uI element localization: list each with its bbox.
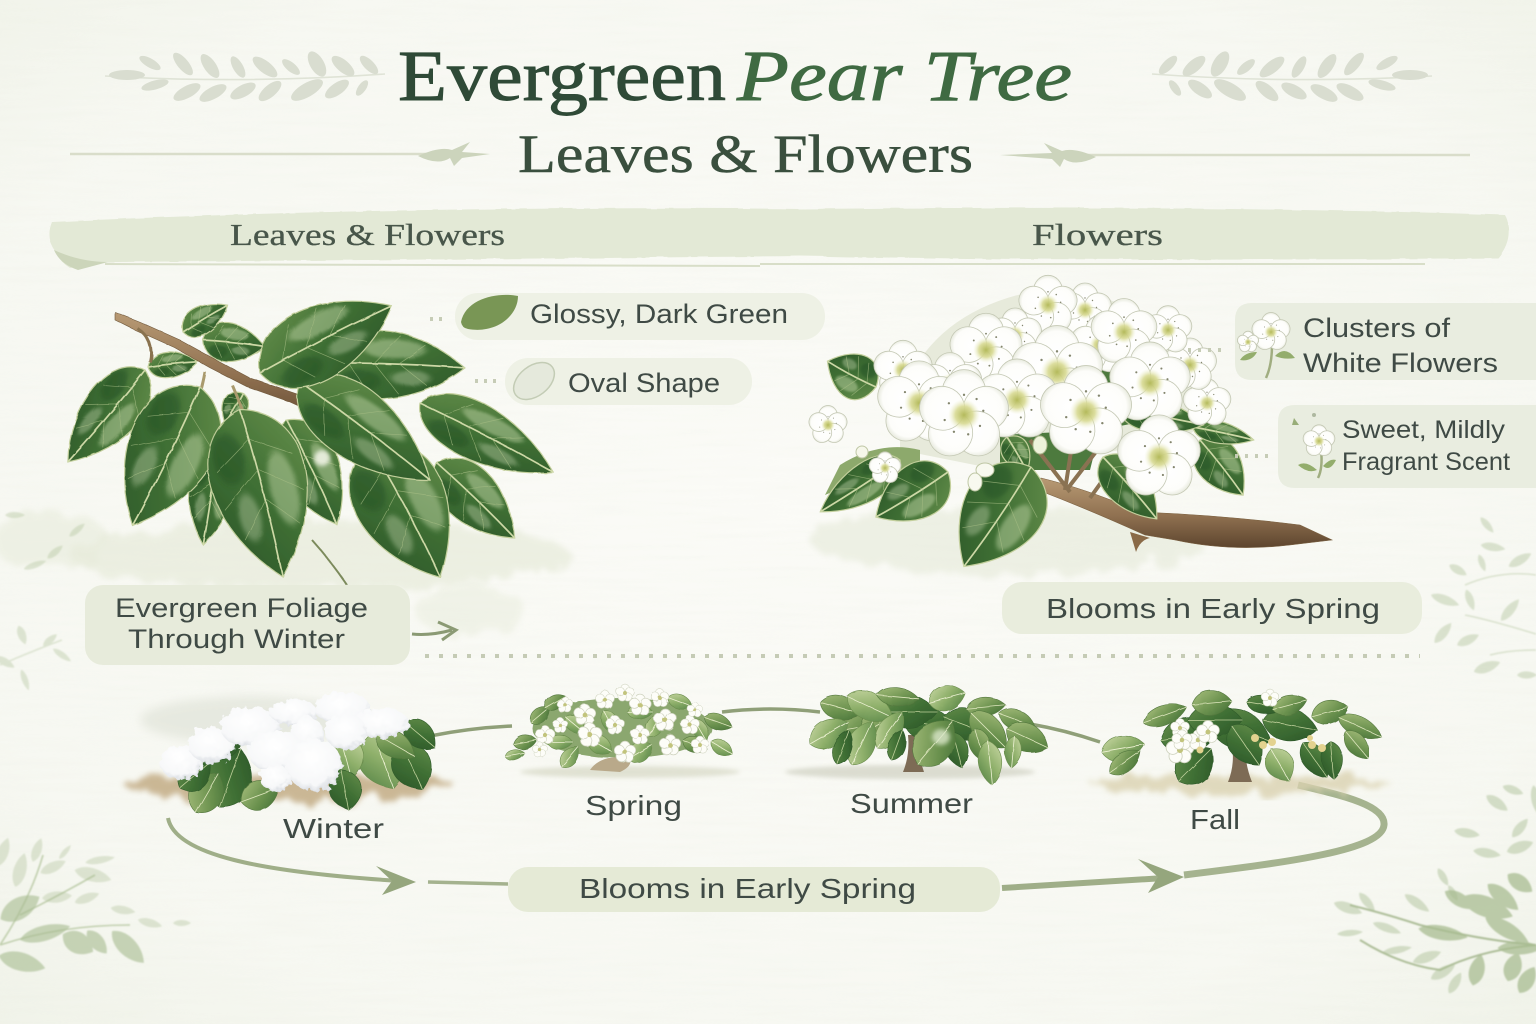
icon: scented flower [1292, 413, 1337, 478]
dotted divider [425, 654, 1420, 658]
callout: clusters of white flowers: White Flowers [1303, 348, 1498, 378]
illustration: glossy leaf branch [46, 273, 570, 599]
decorative foliage: right edge [1429, 515, 1536, 679]
season: spring [504, 684, 740, 778]
icon: dark green leaf [461, 295, 518, 330]
illustration: flower cluster [807, 275, 1332, 589]
decorative foliage: bottom left [0, 836, 191, 977]
callout: glossy dark green [430, 293, 825, 340]
season: fall [1090, 689, 1390, 794]
subtitle rule left [70, 142, 490, 166]
subtitle rule right [1000, 143, 1470, 167]
callout: bottom blooms in early spring: Blooms in Early Spring [579, 873, 916, 904]
callout: sweet mildly fragrant scent: Fragrant Scent [1342, 448, 1510, 476]
label: summer: Summer [850, 788, 973, 819]
callout: bottom blooms in early spring [508, 867, 1000, 912]
title ornament: left sprig [105, 48, 385, 105]
callout: blooms in early spring [1002, 582, 1422, 634]
callout: oval shape [475, 355, 752, 407]
label: sweet mildly fragrant scent: Sweet, Mildly [1342, 416, 1506, 444]
label: glossy dark green: Glossy, Dark Green [530, 299, 788, 329]
title ornament: right sprig [1152, 48, 1432, 105]
arrow stub into the pill [428, 882, 508, 884]
subtitle: Leaves & Flowers [518, 124, 973, 184]
arrow: pill to fall [1002, 859, 1184, 893]
callout: sweet mildly fragrant scent [1235, 405, 1536, 488]
arrow: to the right [412, 622, 456, 640]
season cycle arrows [168, 785, 1384, 895]
decorative foliage: left edge [0, 512, 87, 691]
ribbon heading: flowers: Flowers [1032, 217, 1163, 252]
decorative foliage: bottom right [1332, 782, 1536, 997]
label: winter: Winter [283, 813, 384, 844]
label: through winter: Through Winter [128, 624, 345, 654]
title italic part: Pear Tree [736, 36, 1072, 116]
icon: flower sprig [1236, 313, 1295, 378]
arrow: winter to centre [168, 818, 416, 895]
label: evergreen foliage: Evergreen Foliage [115, 593, 368, 623]
callout: evergreen foliage through winter [85, 585, 456, 665]
title block [70, 36, 1470, 184]
label: spring: Spring [585, 790, 682, 821]
season connector lines [430, 709, 1100, 742]
label: clusters of white flowers: Clusters of [1303, 313, 1451, 343]
callout: blooms in early spring: Blooms in Early Spring [1046, 593, 1380, 624]
title: Evergreen [398, 36, 726, 116]
icon: pale oval leaf [507, 355, 561, 407]
callout: clusters of white flowers [1188, 303, 1536, 380]
season: winter [125, 692, 455, 821]
section ribbon banner [49, 208, 1509, 270]
ribbon heading: leaves and flowers: Leaves & Flowers [230, 217, 505, 252]
label: fall: Fall [1190, 804, 1240, 835]
arrow: fall curve [1184, 785, 1384, 875]
season: summer [785, 681, 1054, 786]
label: oval shape: Oval Shape [568, 368, 720, 398]
